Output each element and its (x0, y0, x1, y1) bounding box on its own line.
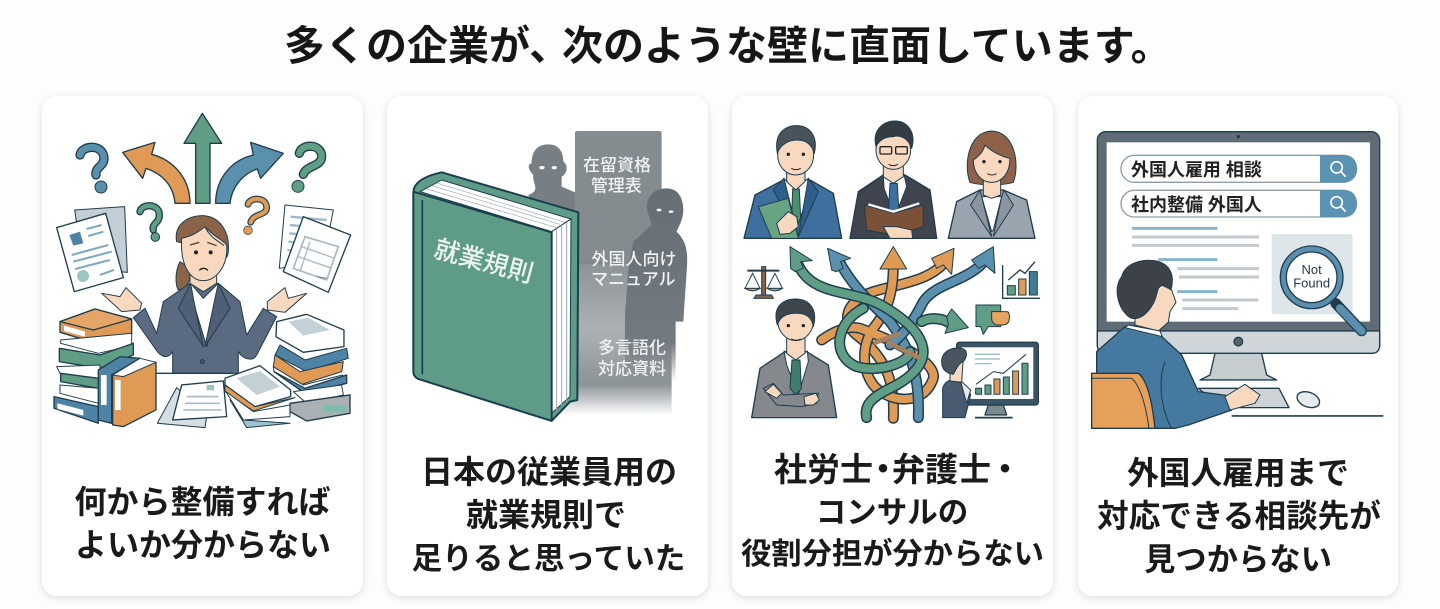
caption: 日本の従業員用の (421, 454, 677, 490)
figure: dark suit with book (850, 121, 937, 238)
keyboard and mouse (1198, 388, 1383, 416)
illustration: rulebook with hidden documents (413, 131, 687, 421)
caption: ・ (988, 451, 1022, 488)
search bar two: 社内整備 外国人 (1131, 195, 1262, 215)
figure: gray suit crossed arms (752, 299, 837, 418)
icon: speech bubbles (976, 305, 1009, 334)
icon: papers on desk (157, 381, 227, 428)
caption (74, 484, 331, 563)
shadow document (575, 131, 662, 264)
hidden document labels: 外国人向け (592, 250, 676, 269)
caption: 弁護士 (892, 451, 991, 488)
figure: presenter (942, 348, 971, 418)
monitor (1097, 132, 1380, 380)
icon: presentation monitor (957, 342, 1038, 418)
caption: 役割分担が分からない (741, 536, 1044, 571)
caption (1097, 455, 1381, 577)
caption: 社労士 (774, 451, 873, 488)
hidden document labels (583, 156, 676, 378)
icon: bar chart (1003, 262, 1040, 298)
silhouette eyes (539, 166, 673, 213)
icon: form documents (279, 205, 351, 292)
caption: 外国人雇用まで (1127, 455, 1349, 491)
search bar one: 外国人雇用 相談 (1131, 160, 1262, 180)
search result lines (1132, 228, 1259, 309)
icon: question marks (80, 146, 322, 241)
caption (741, 451, 1044, 571)
icon: magnifying glass not found: Found (1293, 275, 1330, 290)
icon: magnifying glass not found (1283, 249, 1362, 331)
hidden document labels: 在留資格 (583, 156, 651, 175)
figure: blue suit with clipboard (744, 126, 842, 238)
caption (412, 454, 685, 576)
panel: no consultation partner (1078, 96, 1398, 596)
panel: where to start (42, 96, 363, 596)
illustration: confused employee (54, 113, 351, 428)
caption: 対応できる相談先が (1097, 498, 1381, 534)
illustration: web search not found (1092, 132, 1383, 428)
desk (155, 371, 233, 375)
faded background (545, 262, 672, 415)
silhouette: left person (528, 144, 575, 282)
book title: 就業規則 (431, 235, 536, 289)
illustration: professionals and tangled arrows (744, 121, 1040, 418)
tangled arrows (790, 247, 995, 418)
icon: magnifying glass not found: Not (1302, 262, 1322, 277)
title: 多くの企業が、 (284, 23, 570, 69)
caption: コンサルの (816, 496, 968, 530)
figure: gray suit woman (948, 131, 1035, 238)
not found panel (1272, 234, 1353, 314)
icon: binder stack left (54, 309, 156, 427)
icon: resume documents (57, 207, 127, 292)
title: 次のような壁に直面しています。 (562, 23, 1172, 69)
hidden document labels: 対応資料 (598, 359, 666, 378)
hidden document labels: 多言語化 (598, 339, 666, 358)
search bar two (1121, 190, 1357, 217)
search bar one (1121, 155, 1357, 182)
caption: 就業規則で (466, 497, 626, 533)
panel: work rules not enough (387, 96, 708, 596)
book (413, 172, 578, 421)
hidden document labels: 管理表 (591, 177, 642, 196)
silhouette: right person (625, 188, 687, 382)
hidden document labels: マニュアル (591, 270, 676, 289)
icon: three direction arrows (123, 113, 283, 203)
icon: paper stacks right (225, 314, 350, 428)
icon: scales (745, 267, 782, 298)
caption: ・ (866, 451, 900, 488)
figure: person at computer (1092, 260, 1260, 428)
panel: role sharing (732, 96, 1053, 596)
caption: 見つからない (1144, 542, 1332, 577)
figure: employee with suit (102, 216, 307, 373)
caption: よいか分からない (75, 527, 331, 563)
caption: 何から整備すれば (74, 484, 331, 520)
caption: 足りると思っていた (412, 542, 685, 576)
